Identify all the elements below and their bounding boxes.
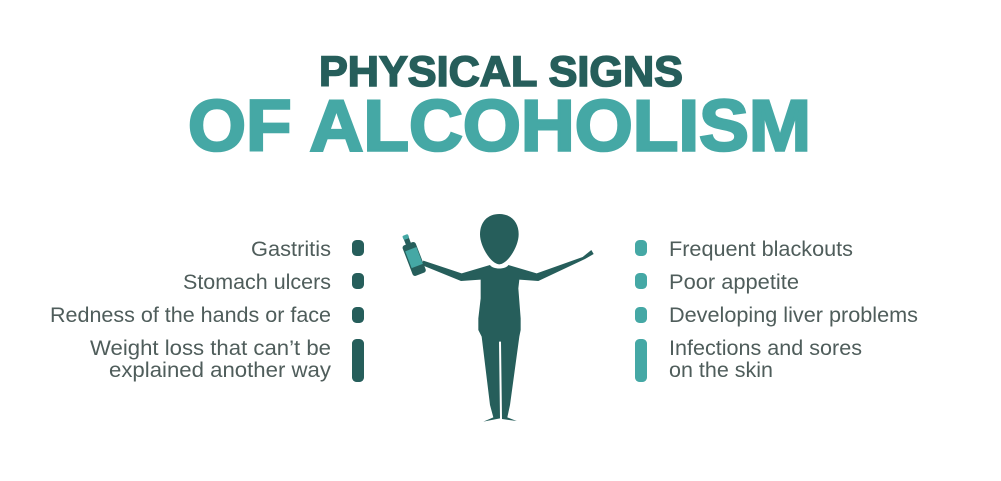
- text: infections: [669, 337, 862, 382]
- heading: of alcoholism: OF ALCOHOLISM: [188, 86, 811, 166]
- text: infections: Infections and sores: [669, 337, 862, 360]
- icon: bottle: [398, 232, 427, 277]
- marker: blackouts: [635, 240, 647, 256]
- marker: redness: [352, 307, 364, 323]
- marker: liver: [635, 307, 647, 323]
- text: weight loss: explained another way: [109, 359, 332, 382]
- heading: physical signs: PHYSICAL SIGNS: [319, 48, 683, 96]
- text: liver: Developing liver problems: [669, 304, 918, 327]
- text: weight loss: [90, 337, 332, 382]
- text: gastritis: Gastritis: [251, 238, 331, 261]
- panel: left list of signs: [50, 238, 364, 382]
- text: blackouts: Frequent blackouts: [669, 238, 853, 261]
- marker: weight loss: [352, 339, 364, 382]
- marker: gastritis: [352, 240, 364, 256]
- text: stomach ulcers: Stomach ulcers: [183, 271, 331, 294]
- panel: right list of signs: [635, 238, 918, 382]
- text: weight loss: Weight loss that can’t be: [90, 337, 331, 360]
- marker: infections: [635, 339, 647, 382]
- head: [480, 214, 519, 264]
- marker: stomach ulcers: [352, 273, 364, 289]
- body and arms: [422, 250, 594, 422]
- text: infections: on the skin: [669, 359, 773, 382]
- text: appetite: Poor appetite: [669, 271, 799, 294]
- title: [188, 48, 811, 166]
- text: redness: Redness of the hands or face: [50, 304, 331, 327]
- marker: appetite: [635, 273, 647, 289]
- figure: person holding bottle: [398, 214, 594, 422]
